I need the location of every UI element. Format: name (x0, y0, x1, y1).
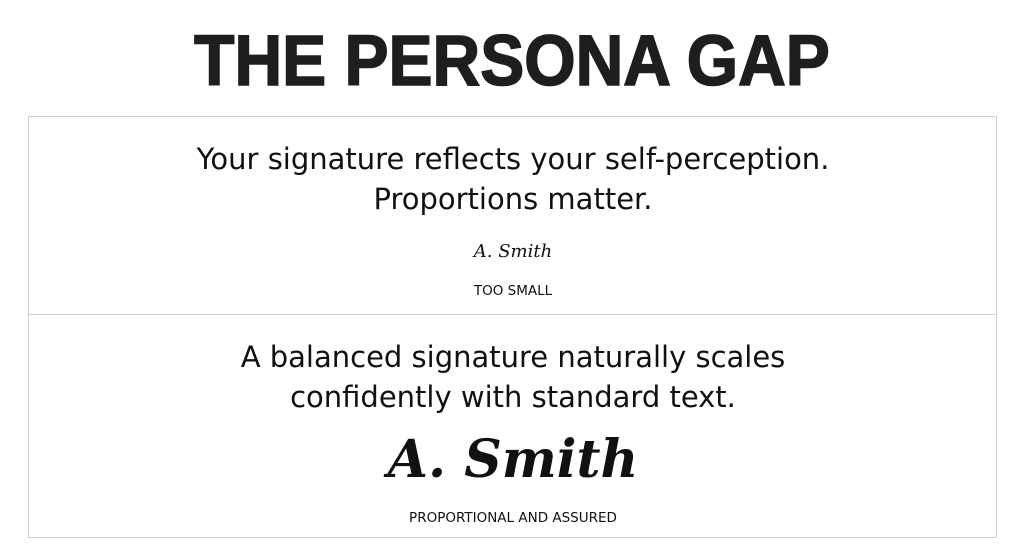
text block: balanced (241, 340, 785, 414)
small signature: A. Smith (474, 241, 552, 262)
text block: balanced: A balanced signature naturally scales (241, 340, 785, 374)
large signature: A. Smith (388, 429, 638, 490)
text block: self-perception (196, 142, 829, 216)
label: too small: TOO SMALL (474, 283, 552, 299)
panel: too small (28, 116, 997, 315)
text block: balanced: confidently with standard text. (290, 380, 736, 414)
text block: self-perception: Proportions matter. (373, 182, 653, 216)
text block: self-perception: Your signature reflects your self-perception. (197, 142, 829, 176)
panel: proportional (28, 314, 997, 538)
label: proportional: PROPORTIONAL AND ASSURED (409, 510, 617, 526)
title: THE PERSONA GAP (194, 20, 830, 100)
